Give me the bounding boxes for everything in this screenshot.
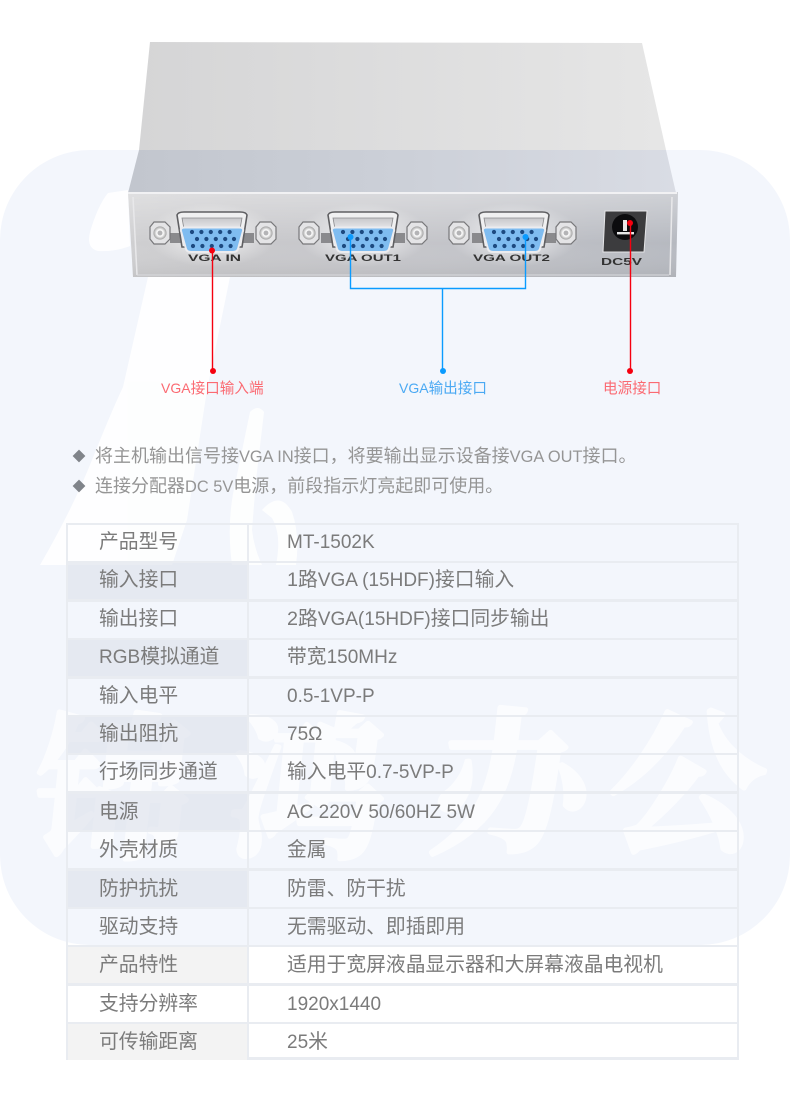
row: 外壳材质: 金属 xyxy=(287,839,327,861)
port: DC 5V power xyxy=(601,211,647,268)
row: 支持分辨率: 1920x1440 xyxy=(287,994,381,1015)
port: DC 5V power: DC5V xyxy=(601,257,642,268)
row: RGB模拟通道: RGB模拟通道 xyxy=(99,646,219,668)
port: VGA OUT2: VGA OUT2 xyxy=(473,253,550,264)
row: 可传输距离 xyxy=(68,1024,328,1060)
row: 产品特性: 产品特性 xyxy=(99,954,178,976)
row: 外壳材质 xyxy=(99,838,327,861)
row: 产品型号 xyxy=(99,531,375,553)
callout line: power xyxy=(627,220,633,374)
device top face xyxy=(128,42,676,193)
watermark text xyxy=(26,701,774,879)
note 2: 连接分配器DC 5V电源，前段指示灯亮起即可使用。 xyxy=(95,476,503,496)
row: 支持分辨率: 支持分辨率 xyxy=(99,993,198,1015)
row: 驱动支持: 无需驱动、即插即用 xyxy=(287,916,465,938)
row: 输入电平 xyxy=(99,685,375,707)
row: 行场同步通道 xyxy=(99,761,454,783)
row: 防护抗扰 xyxy=(68,871,406,907)
row: 驱动支持 xyxy=(99,916,465,938)
row: 输入接口 xyxy=(68,563,514,599)
row: 防护抗扰: 防雷、防干扰 xyxy=(287,878,406,900)
watermark text: 锦 xyxy=(26,706,200,879)
row: 行场同步通道: 输入电平0.7-5VP-P xyxy=(287,761,454,783)
port: VGA IN: VGA IN xyxy=(188,253,241,264)
row: 支持分辨率 xyxy=(99,993,381,1015)
row: RGB模拟通道: 带宽150MHz xyxy=(287,646,397,668)
label: VGA output: VGA输出接口 xyxy=(399,380,487,397)
callout line: VGA input xyxy=(209,248,216,374)
row: 可传输距离: 可传输距离 xyxy=(99,1031,198,1053)
row: 行场同步通道: 行场同步通道 xyxy=(99,761,218,783)
row: 防护抗扰: 防护抗扰 xyxy=(99,878,178,900)
port: VGA OUT1: VGA OUT1 xyxy=(325,253,402,264)
callout line: VGA output xyxy=(348,234,528,374)
row: 产品特性 xyxy=(68,947,663,983)
row: 产品特性: 适用于宽屏液晶显示器和大屏幕液晶电视机 xyxy=(287,954,663,976)
watermark text: 鸿 xyxy=(220,706,394,879)
row: 输出接口: 2路VGA(15HDF)接口同步输出 xyxy=(287,608,549,630)
row: 输入接口: 输入接口 xyxy=(99,569,178,591)
port: VGA OUT1 xyxy=(297,203,429,267)
row: 电源: AC 220V 50/60HZ 5W xyxy=(287,802,475,823)
row: 输出接口 xyxy=(99,608,549,630)
row: 输入电平: 输入电平 xyxy=(99,685,178,707)
row: 驱动支持: 驱动支持 xyxy=(99,916,178,938)
label: power: 电源接口 xyxy=(603,380,661,397)
label: VGA input: VGA接口输入端 xyxy=(161,380,264,397)
row: 输入接口: 1路VGA (15HDF)接口输入 xyxy=(287,569,514,591)
row: 外壳材质: 外壳材质 xyxy=(99,839,178,861)
row: 输出接口: 输出接口 xyxy=(99,608,178,630)
port: VGA IN xyxy=(146,203,278,267)
row: 产品型号: MT-1502K xyxy=(287,532,375,553)
note 1: 将主机输出信号接VGA IN接口，将要输出显示设备接VGA OUT接口。 xyxy=(95,446,637,466)
row: 输出阻抗: 75Ω xyxy=(287,724,322,745)
row: 电源 xyxy=(68,794,475,830)
device front panel xyxy=(128,192,678,277)
row: RGB模拟通道 xyxy=(68,640,397,676)
row: 输出阻抗 xyxy=(68,717,322,753)
specification table xyxy=(66,523,739,1060)
port: VGA OUT2 xyxy=(448,203,580,267)
row: 电源: 电源 xyxy=(99,801,139,823)
watermark text: 公 xyxy=(600,701,774,874)
row: 可传输距离: 25米 xyxy=(287,1031,328,1053)
row: 输入电平: 0.5-1VP-P xyxy=(287,686,375,707)
watermark text: 办 xyxy=(424,701,611,874)
row: 产品型号: 产品型号 xyxy=(99,531,178,553)
product: VGA splitter with callouts xyxy=(128,42,678,397)
row: 输出阻抗: 输出阻抗 xyxy=(99,723,178,745)
